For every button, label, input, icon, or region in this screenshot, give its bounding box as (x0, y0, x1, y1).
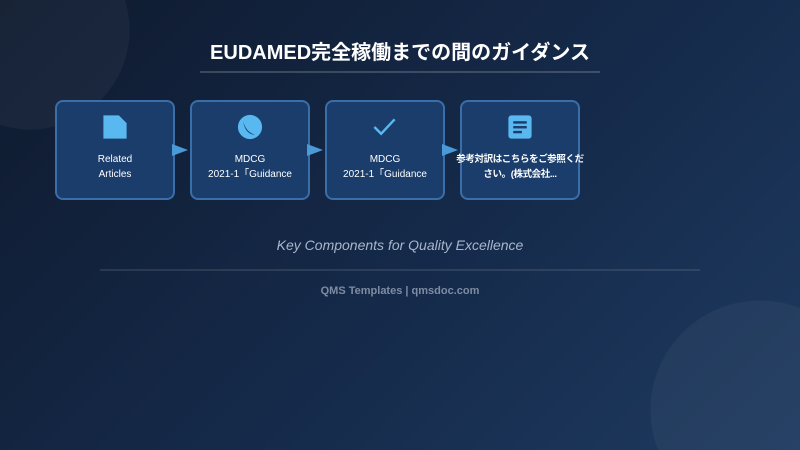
text: step 3: MDCG (370, 154, 400, 165)
footer: QMS Templates | qmsdoc.com (321, 285, 479, 297)
flow: step 2 (190, 100, 310, 200)
text: step 1 (98, 154, 132, 180)
title: EUDAMED完全稼働までの間のガイダンス (210, 42, 590, 64)
text: step 1: Related (98, 154, 132, 165)
arrow 2 (307, 144, 323, 156)
text: step 4 (456, 153, 584, 180)
text: step 1: Articles (99, 169, 131, 180)
text: step 2: MDCG (235, 154, 265, 165)
icon: list document (508, 115, 532, 139)
text: step 2: 2021-1「Guidance (208, 169, 292, 180)
text: step 4: さい。(株式会社... (483, 169, 557, 180)
arrow 3 (442, 144, 458, 156)
flow: step 3 (325, 100, 445, 200)
icon: circle (238, 114, 262, 140)
icon: check (374, 118, 396, 136)
subtitle: Key Components for Quality Excellence (277, 237, 523, 253)
text: step 3: 2021-1「Guidance (343, 169, 427, 180)
arrow 1 (172, 144, 188, 156)
text: step 3 (343, 154, 427, 180)
text: step 4: 参考対訳はこちらをご参照くだ (456, 154, 584, 165)
flow: step 4 (460, 100, 580, 200)
text: step 2 (208, 154, 292, 180)
flow: step 1 (55, 100, 175, 200)
icon: document (103, 115, 127, 139)
